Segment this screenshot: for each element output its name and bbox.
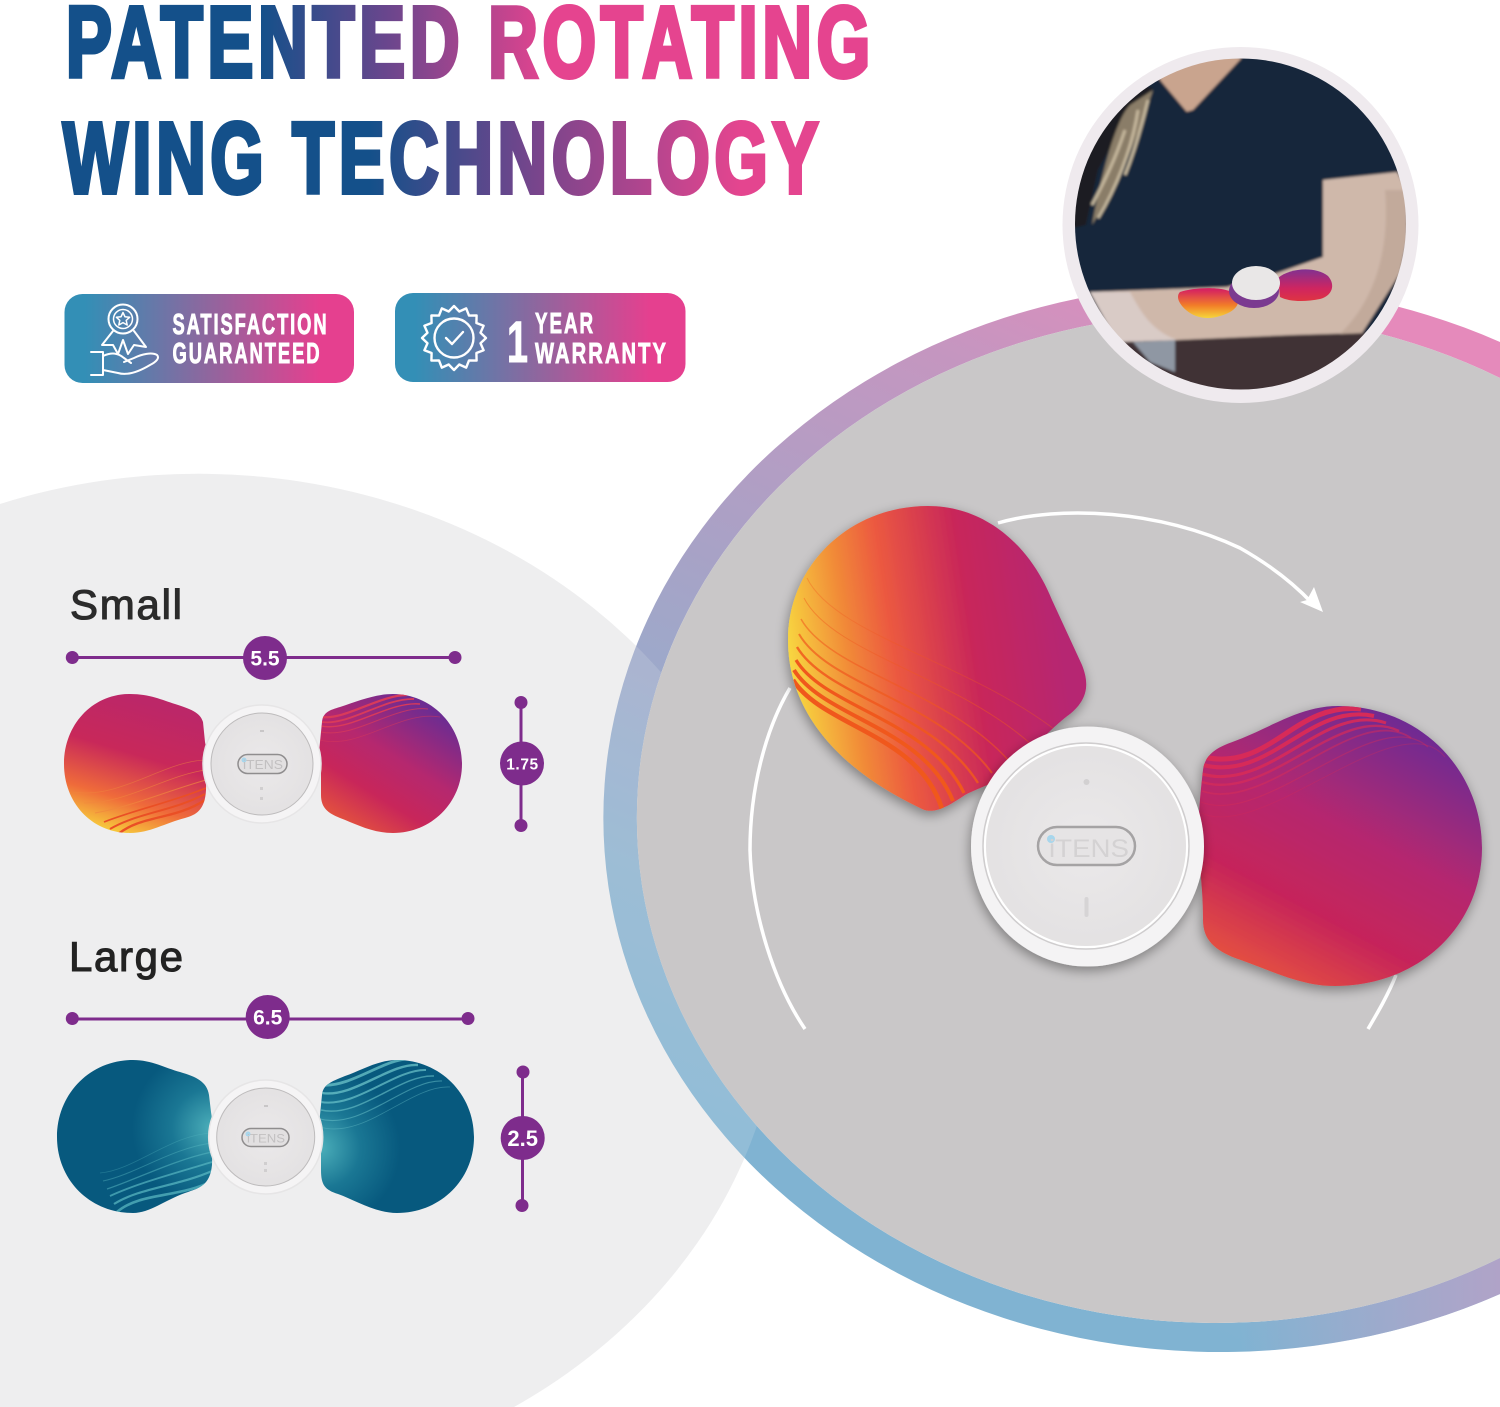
icon: device on arm bbox=[1229, 266, 1280, 308]
photo: woman wearing device on forearm bbox=[1060, 45, 1425, 405]
icon: right wing on arm bbox=[1278, 269, 1332, 301]
height dimension: large bbox=[501, 1066, 545, 1212]
title bbox=[63, 0, 875, 214]
big device bbox=[971, 726, 1204, 966]
icon: left wing on arm bbox=[1178, 288, 1238, 318]
badge text: GUARANTEED bbox=[172, 338, 322, 370]
small power button: iTENS bbox=[243, 758, 283, 772]
small left wing bbox=[64, 694, 207, 835]
warranty text bbox=[507, 308, 668, 375]
width dimension: large: 6.5 bbox=[253, 1006, 283, 1030]
icon: medal on hand bbox=[91, 304, 158, 375]
title: WING TECHNOLOGY bbox=[63, 102, 823, 214]
heading: large: Large bbox=[69, 933, 183, 980]
arrowhead bbox=[1300, 587, 1323, 612]
width dimension: small bbox=[66, 636, 462, 680]
gradient ring around rotating wing panel bbox=[0, 284, 1500, 1407]
large left wing bbox=[57, 1060, 213, 1213]
large right wing bbox=[319, 1059, 474, 1213]
width dimension: small: 5.5 bbox=[250, 648, 280, 670]
badge: satisfaction guaranteed bbox=[64, 294, 354, 383]
icon: seal with check bbox=[422, 306, 486, 370]
width dimension: large bbox=[66, 995, 475, 1039]
warranty text: WARRANTY bbox=[535, 338, 668, 370]
small device bbox=[203, 705, 321, 823]
warranty text: 1 bbox=[507, 310, 528, 375]
panel: grey rotating wing background bbox=[637, 313, 1500, 1323]
large power button: iTENS bbox=[247, 1132, 285, 1146]
height dimension: small bbox=[500, 696, 544, 832]
power button with logo bbox=[1038, 827, 1135, 865]
background panel: light grey sizes area bbox=[0, 474, 781, 1407]
small right wing bbox=[319, 694, 462, 833]
power button with logo: iTENS bbox=[1049, 835, 1129, 863]
large device bbox=[209, 1080, 323, 1194]
warranty text: YEAR bbox=[535, 308, 595, 340]
badge text bbox=[172, 309, 328, 370]
big left wing bbox=[788, 506, 1086, 811]
badge: 1 year warranty bbox=[395, 293, 686, 382]
height dimension: small: 1.75 bbox=[506, 756, 539, 774]
badge text: SATISFACTION bbox=[172, 309, 328, 341]
heading: small: Small bbox=[70, 581, 182, 628]
height dimension: large: 2.5 bbox=[507, 1126, 538, 1151]
rotation arrow arc bbox=[750, 513, 1396, 1029]
big right wing bbox=[1198, 706, 1482, 986]
